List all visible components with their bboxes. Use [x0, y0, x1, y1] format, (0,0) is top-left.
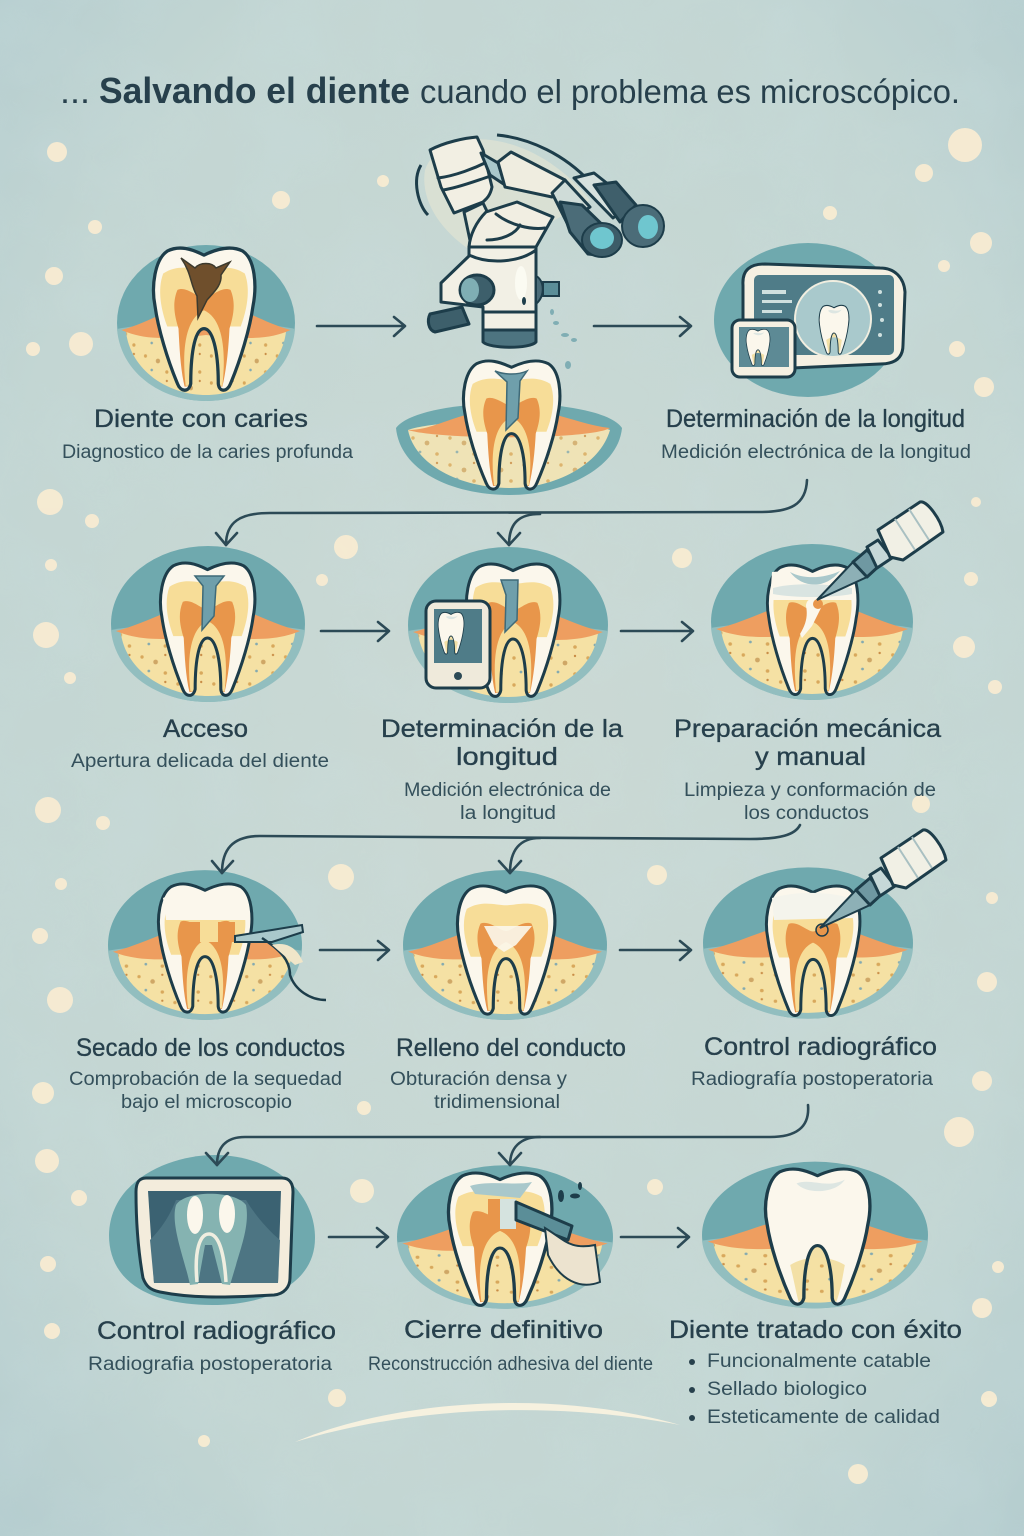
heading: Cierre definitivo: [404, 1316, 603, 1344]
description: Medición electrónica de: [404, 780, 611, 801]
panel: preparacion mecanica y manual: [674, 502, 943, 824]
description: [69, 1069, 342, 1113]
panel: diente tratado con exito: [669, 1162, 962, 1428]
illustration: restoration: [397, 1165, 613, 1309]
panel: determinacion de la longitud (row 2): [381, 547, 623, 824]
title: [60, 70, 960, 111]
arrow: [321, 622, 389, 641]
panel: acceso: [71, 546, 329, 772]
arrow: [329, 1228, 388, 1247]
illustration: healthy tooth: [702, 1162, 928, 1308]
connector: row 2 to row 3: [212, 825, 800, 873]
description: tridimensional: [434, 1092, 560, 1113]
illustration: tooth with handpiece: [703, 830, 946, 1019]
panel: relleno del conducto: [390, 870, 626, 1113]
title: ...: [60, 73, 90, 111]
heading: [381, 715, 623, 771]
benefits list: Esteticamente de calidad: [707, 1407, 940, 1428]
heading: Control radiográfico: [704, 1033, 937, 1061]
panel: control radiografico (row 4): [88, 1155, 336, 1375]
description: Radiografía postoperatoria: [691, 1069, 933, 1090]
illustration: tooth with apex locator: [408, 547, 608, 703]
arrow: [621, 622, 693, 641]
benefits list: Funcionalmente catable: [707, 1351, 931, 1372]
arrow: [620, 941, 691, 960]
description: Reconstrucción adhesiva del diente: [368, 1354, 653, 1375]
arrow: [317, 317, 405, 336]
heading: Acceso: [163, 715, 248, 743]
heading: Preparación mecánica: [674, 715, 941, 743]
panel: control radiografico (row 3): [691, 830, 946, 1090]
description: [404, 780, 611, 824]
title: Salvando el diente: [99, 70, 410, 111]
description: [684, 780, 936, 824]
panel: cierre definitivo: [368, 1165, 653, 1375]
heading: Control radiográfico: [97, 1317, 336, 1345]
heading: Relleno del conducto: [396, 1034, 626, 1062]
benefits list: Sellado biologico: [707, 1379, 867, 1400]
description: Radiografia postoperatoria: [88, 1354, 332, 1375]
illustration: drying: [108, 870, 326, 1020]
illustration: radiograph: [109, 1155, 315, 1305]
benefits list: [689, 1351, 940, 1428]
connector: row 1 to row 2: [216, 480, 807, 545]
icon: microscope: [417, 135, 664, 369]
heading: Secado de los conductos: [76, 1034, 345, 1062]
heading: Diente tratado con éxito: [669, 1316, 962, 1344]
heading: Determinación de la longitud: [666, 405, 965, 433]
illustration: open tooth: [111, 546, 305, 702]
illustration: tooth with file: [396, 361, 622, 495]
heading: longitud: [456, 743, 558, 771]
description: Diagnostico de la caries profunda: [62, 442, 353, 463]
description: Apertura delicada del diente: [71, 751, 329, 772]
description: [390, 1069, 568, 1113]
description: bajo el microscopio: [121, 1092, 292, 1113]
panel: secado de los conductos: [69, 870, 345, 1113]
heading: Diente con caries: [94, 405, 308, 433]
description: Obturación densa y: [390, 1069, 568, 1090]
illustration: tooth with caries: [117, 245, 295, 401]
panel: diente con caries: [62, 245, 353, 463]
arrow: [594, 317, 691, 336]
description: Comprobación de la sequedad: [69, 1069, 342, 1090]
decorative swoosh: [295, 1403, 680, 1442]
connector: row 3 to row 4: [206, 1105, 808, 1165]
description: Medición electrónica de la longitud: [661, 442, 971, 463]
arrow: [621, 1228, 689, 1247]
description: la longitud: [460, 803, 556, 824]
illustration: filled canal: [403, 870, 607, 1020]
heading: Determinación de la: [381, 715, 623, 743]
heading: y manual: [755, 743, 866, 771]
description: Limpieza y conformación de: [684, 780, 936, 801]
title: cuando el problema es microscópico.: [420, 73, 960, 110]
heading: [674, 715, 941, 771]
illustration: monitor: [714, 243, 905, 397]
illustration: tooth with handpiece: [711, 502, 943, 700]
panel: microscope and tooth: [396, 135, 664, 495]
arrow: [320, 941, 389, 960]
panel: determinacion de la longitud (row 1): [661, 243, 971, 463]
description: los conductos: [744, 803, 869, 824]
